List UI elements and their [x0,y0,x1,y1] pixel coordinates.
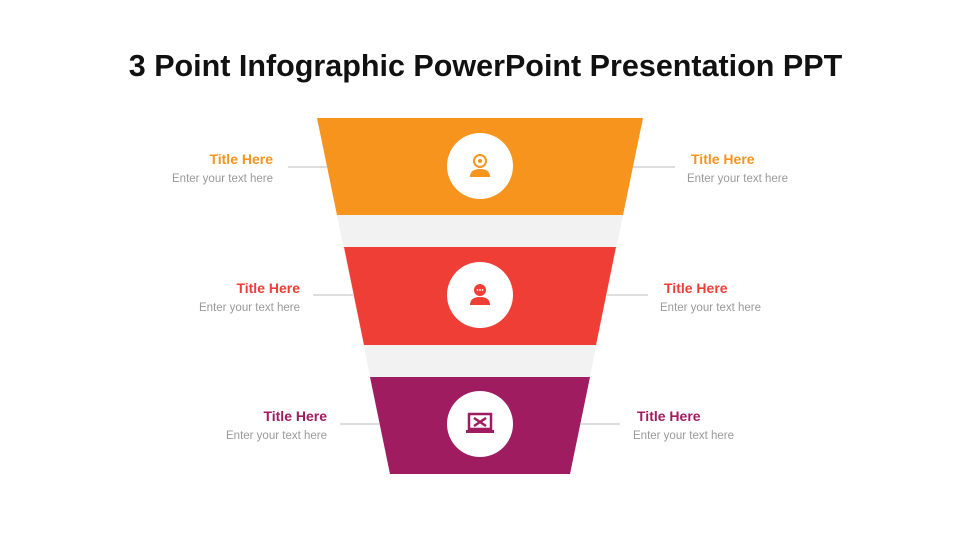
text: orange left: Enter your text here [172,173,273,185]
title: 3 Point Infographic PowerPoint Presentation PPT [129,49,843,83]
band: orange [317,118,643,215]
text: orange right: Title Here [691,151,755,167]
text: purple left: Enter your text here [226,430,327,442]
text: red left [199,280,300,314]
text: purple left: Title Here [263,408,327,424]
icon: target person [447,133,513,199]
text: purple right: Enter your text here [633,430,734,442]
text: orange left: Title Here [209,151,273,167]
text: purple right [633,408,734,442]
connector lines [288,167,675,424]
band: red [344,247,616,345]
icon: chat person [447,262,513,328]
text: orange left [172,151,273,185]
icon: laptop tools [447,391,513,457]
text: orange right [687,151,788,185]
text: red right: Enter your text here [660,302,761,314]
text: orange right: Enter your text here [687,173,788,185]
band: purple [370,377,590,474]
text: red right [660,280,761,314]
text: purple left [226,408,327,442]
funnel [317,118,643,474]
text: red left: Enter your text here [199,302,300,314]
text: red left: Title Here [236,280,300,296]
text: purple right: Title Here [637,408,701,424]
text: red right: Title Here [664,280,728,296]
